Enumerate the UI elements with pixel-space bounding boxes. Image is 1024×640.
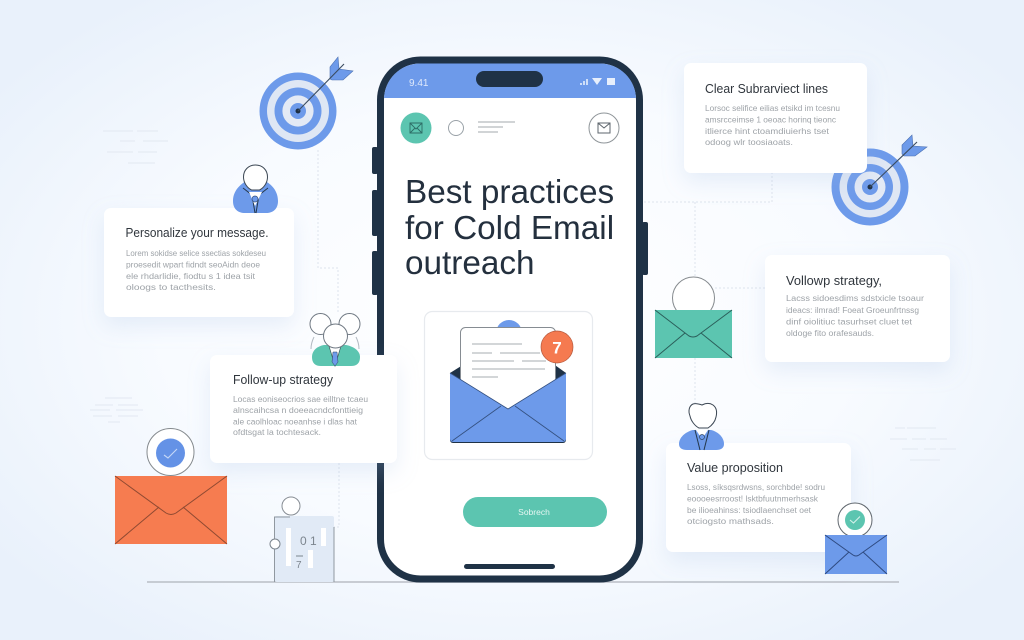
card: value proposition: Value proposition [687, 461, 783, 475]
card: value proposition: otciogsto mathsads. [687, 516, 774, 526]
card: follow-up strategy: ale caolhloac noeanhse i dlas hat [233, 416, 358, 426]
card: vollowp strategy: oldoge fito orafesauds. [786, 328, 874, 338]
title: outreach [405, 245, 535, 282]
card: personalize your message: Personalize your message. [126, 226, 268, 240]
title: for Cold Email [405, 210, 614, 247]
icon: person above personalize card [233, 165, 278, 213]
card: value proposition: Lsoss, síksqsrdwsns, sorchbde! sodru [687, 482, 825, 492]
card: clear subject lines: odoog wlr toosiaoats. [705, 137, 793, 147]
icon: orange envelope with blue check [115, 428, 227, 544]
app bar icons [400, 112, 619, 144]
notification badge [541, 331, 573, 363]
icon: document with figures: 0 1 [300, 534, 317, 548]
icon: document with figures [270, 497, 334, 582]
phone body [380, 60, 640, 579]
ground line [147, 581, 899, 583]
icon: teal envelope with circle [655, 277, 732, 358]
icon: target top left [260, 57, 353, 150]
button [463, 497, 607, 527]
card: clear subject lines: amsrcceimse 1 oeoac horinq tieonc [705, 114, 837, 124]
card: follow-up strategy: ofdtsgat la tochtesack. [233, 427, 321, 437]
email illustration card [424, 312, 592, 460]
card: clear subject lines: itlierce hint ctoamdiuierhs tset [705, 126, 830, 136]
card: personalize your message [104, 208, 294, 317]
card: clear subject lines [684, 63, 927, 226]
card: vollowp strategy: dinf oiolitiuc tasurhset cluet tet [786, 316, 913, 326]
card: value proposition: eoooeesrroost! lsktbfuutnmerhsask [687, 494, 819, 504]
card: follow-up strategy: Follow-up strategy [233, 373, 334, 387]
card: vollowp strategy: ideacs: ilmrad! Foeat Groeunfrtnssg [786, 305, 919, 315]
card: vollowp strategy [765, 255, 950, 362]
card: follow-up strategy: Locas eoniseocrios sae eilltne tcaeu [233, 394, 368, 404]
card: follow-up strategy [210, 355, 397, 463]
card: vollowp strategy: Vollowp strategy, [786, 274, 882, 288]
phone status bar: 9.41 [409, 78, 429, 89]
card: value proposition [666, 443, 851, 552]
button: Sobrech [518, 507, 550, 517]
title: Best practices [405, 174, 614, 211]
notification badge: 7 [552, 338, 562, 358]
card: personalize your message: proesedit wpart fidndt seoAidn deoe [126, 260, 260, 270]
card: clear subject lines: Lorsoc selifice eilias etsikd im tcesnu [705, 103, 840, 113]
card: value proposition: be ilioeahinss: tsiodlaenchset oet [687, 505, 812, 515]
icon: blue envelope with teal check [825, 503, 887, 574]
card: personalize your message: Lorem sokidse selice ssectias sokdeseu [126, 248, 266, 258]
card: vollowp strategy: Lacss sidoesdims sdstxicle tsoaur [786, 293, 924, 303]
card: clear subject lines: Clear Subrarviect lines [705, 82, 828, 96]
card: personalize your message: ele rhdarlidie, fiodtu s 1 idea tsit [126, 271, 256, 281]
home indicator [464, 564, 555, 569]
card: personalize your message: oloogs to tacthesits. [126, 282, 216, 292]
phone status bar [384, 63, 636, 98]
phone [372, 60, 648, 579]
icon: group of people [310, 314, 360, 366]
card: follow-up strategy: alnscaihcsa n doeeacndcfonttieig [233, 405, 363, 415]
connector lines [318, 150, 772, 527]
icon: target right [832, 135, 927, 226]
phone side buttons [372, 147, 648, 295]
icon: person above value card [679, 404, 724, 450]
icon: document with figures: 7 [296, 560, 302, 571]
